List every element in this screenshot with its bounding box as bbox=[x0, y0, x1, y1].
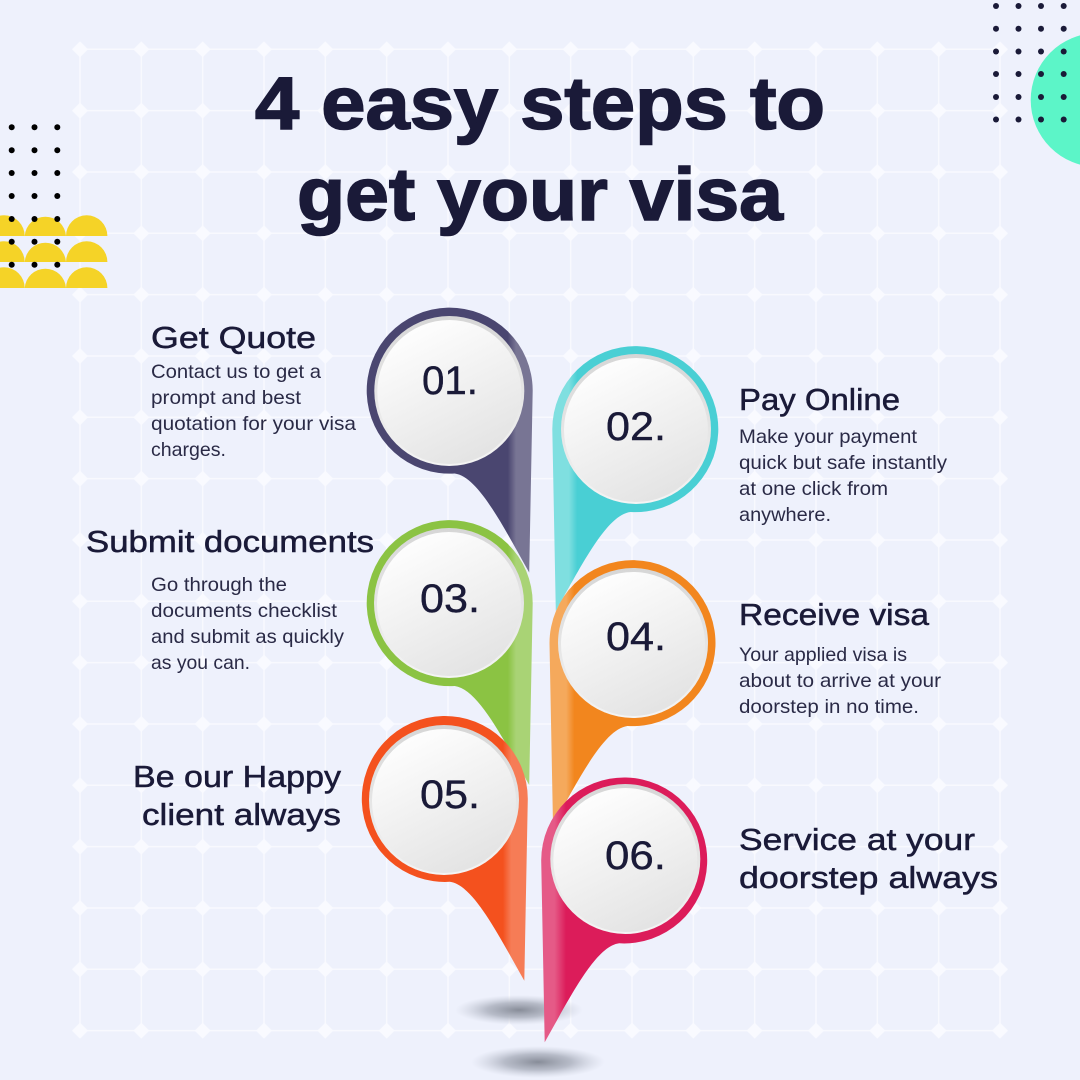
step 1 text: Get Quote: quotation for your visa bbox=[151, 413, 356, 435]
step 2 text: Pay Online bbox=[739, 382, 947, 526]
pin 01: 01. bbox=[422, 359, 478, 403]
step 5 text: Be our Happy client always bbox=[133, 759, 342, 832]
pin 04 bbox=[550, 560, 715, 825]
step 4 text: Receive visa: doorstep in no time. bbox=[739, 696, 919, 718]
ground shadows bbox=[455, 995, 605, 1078]
pin 02 bbox=[552, 346, 718, 611]
pin 03 bbox=[367, 520, 533, 785]
step 4 text: Receive visa bbox=[739, 597, 942, 718]
step 1 text: Get Quote bbox=[151, 320, 356, 461]
step 4 text: Receive visa: Your applied visa is bbox=[739, 644, 907, 666]
step 1 text: Get Quote: Contact us to get a bbox=[151, 361, 321, 383]
pin 05 bbox=[362, 716, 528, 981]
step 2 text: Pay Online: at one click from bbox=[739, 478, 888, 500]
pin 01 bbox=[367, 308, 533, 572]
step 1 text: Get Quote: charges. bbox=[151, 439, 226, 461]
step 5 text: Be our Happy client always: client always bbox=[142, 797, 341, 832]
decoration: mint circle top right bbox=[1031, 33, 1080, 167]
step 2 text: Pay Online: anywhere. bbox=[739, 504, 831, 526]
pin 06: 06. bbox=[605, 834, 666, 878]
step 3 text: Submit documents: Go through the bbox=[151, 574, 287, 596]
title: get your visa bbox=[297, 153, 784, 236]
step 2 text: Pay Online: Make your payment bbox=[739, 426, 918, 448]
step 2 text: Pay Online: Pay Online bbox=[739, 382, 900, 417]
pin 04: 04. bbox=[606, 615, 666, 659]
pin 06 bbox=[541, 777, 707, 1042]
decoration: dot grid left bbox=[9, 124, 60, 268]
pin 05: 05. bbox=[420, 773, 480, 817]
step 3 text: Submit documents: as you can. bbox=[151, 652, 250, 674]
title bbox=[255, 62, 825, 236]
step 6 text: Service at your doorstep always: Service at your bbox=[739, 822, 975, 857]
step 4 text: Receive visa: about to arrive at your bbox=[739, 670, 942, 692]
step 1 text: Get Quote: Get Quote bbox=[151, 320, 316, 355]
pin 02: 02. bbox=[606, 405, 666, 449]
decoration: dot grid top right bbox=[993, 3, 1067, 122]
step 6 text: Service at your doorstep always: doorstep always bbox=[739, 860, 998, 895]
step 6 text: Service at your doorstep always bbox=[739, 822, 998, 895]
step 4 text: Receive visa: Receive visa bbox=[739, 597, 930, 632]
step 1 text: Get Quote: prompt and best bbox=[151, 387, 302, 409]
step 3 text: Submit documents bbox=[86, 524, 374, 674]
decoration: yellow semicircles left bbox=[0, 215, 107, 288]
step 2 text: Pay Online: quick but safe instantly bbox=[739, 452, 947, 474]
step 3 text: Submit documents: and submit as quickly bbox=[151, 626, 344, 648]
pin 03: 03. bbox=[420, 577, 480, 621]
title: 4 easy steps to bbox=[255, 62, 825, 145]
step 5 text: Be our Happy client always: Be our Happy bbox=[133, 759, 342, 794]
step 3 text: Submit documents: documents checklist bbox=[151, 600, 338, 622]
step 3 text: Submit documents: Submit documents bbox=[86, 524, 374, 559]
